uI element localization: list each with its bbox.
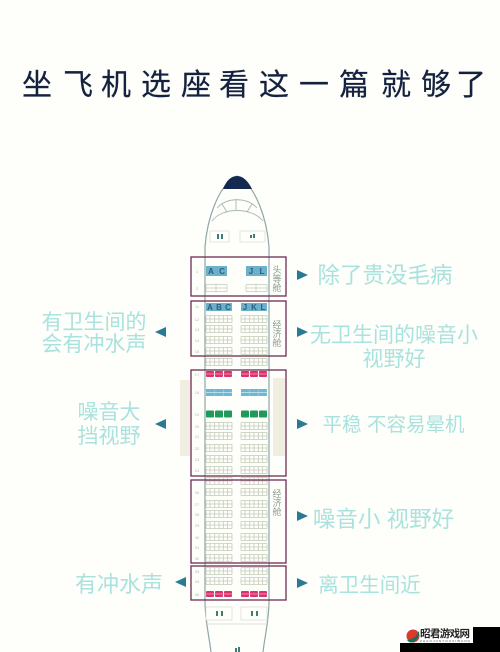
panel: first class: 1 [196,269,199,274]
panel: exit row section [191,370,286,476]
panel: rear rows: 34 [195,579,200,584]
label: stable: 平稳 不容易晕机 [323,414,465,436]
panel: first class: 2 [196,286,199,291]
panel: economy rear: 29 [195,523,200,528]
seats: A C: C [219,267,225,276]
icon: nose cap [223,176,252,189]
label: expensive: 除了贵没毛病 [317,263,453,288]
panel: economy front: 15 [195,349,200,354]
seats: A B C: B [216,303,222,312]
panel: exit row section: 17 [195,372,200,377]
panel: economy front: 经 [272,319,282,330]
panel: first class [191,257,286,296]
seats: J K L [241,303,267,312]
panel: economy rear: 32 [195,556,200,561]
panel: rear rows: 35 [195,592,200,597]
icon: front toilets [210,231,265,242]
seats: J K L: K [251,303,257,312]
title: 坐飞机选座看这一篇就够了 [22,60,486,104]
panel: exit row section: 19 [195,412,200,417]
label: near lavatory: 离卫生间近 [318,574,421,597]
panel: wing shading [180,378,285,456]
seat rows: standard [206,316,267,584]
panel: economy front: 12 [195,317,200,322]
seats: J L [246,266,267,276]
watermark logo [400,627,500,652]
icon: logo ball [406,630,420,642]
panel: exit row section: 24 [195,468,200,473]
aircraft fuselage [205,176,269,652]
panel: first class: 舱 [272,282,282,293]
panel: exit row section: 18 [195,390,200,395]
seats: J L: J [249,267,253,276]
panel: economy rear: 经 [272,488,282,499]
label: quiet: 噪音小 视野好 [313,507,454,532]
watermark logo: 昭君游戏网 [420,627,470,640]
label: no lavatory: 视野好 [362,348,426,371]
seats: J L: L [260,267,265,276]
panel: economy front: 13 [195,327,200,332]
watermark logo: ZHAOJUNYOUXIWANG [420,639,471,643]
seats: A B C: C [225,303,231,312]
panel: economy rear: 30 [195,535,200,540]
panel: rear rows: 33 [195,569,200,574]
panel: economy front: 舱 [272,337,282,348]
label: has lavatory [42,311,146,356]
label: has lavatory: 会有冲水声 [42,333,146,356]
panel: economy front: 济 [272,328,282,339]
panel: rear rows [191,566,286,600]
seats: row 2 [206,284,267,292]
label: flush noise: 有冲水声 [75,572,163,597]
panel: economy rear: 27 [195,502,200,507]
panel: economy rear [191,480,286,563]
panel: exit row section: 20 [195,424,200,429]
seats: green row [206,410,267,418]
panel: economy rear: 31 [195,545,200,550]
seats: A C [206,266,227,276]
panel: exit row section: 23 [195,457,200,462]
arrows [155,270,308,588]
panel: economy rear: 28 [195,512,200,517]
panel: exit row section: 21 [195,434,200,439]
label: has lavatory: 有卫生间的 [42,311,146,334]
panel: economy rear: 26 [195,490,200,495]
label: noisy: 挡视野 [78,425,140,448]
seats: J K L: L [261,303,266,312]
seats: pink rear row [206,591,267,597]
panel: first class: 等 [272,273,282,284]
label: no lavatory [310,324,478,371]
panel: exit row section: 22 [195,446,200,451]
label: no lavatory: 无卫生间的噪音小 [310,324,478,347]
panel: economy rear: 济 [272,497,282,508]
seats: A C: A [208,267,214,276]
panel: first class: 头 [272,265,282,275]
seats: A B C: A [207,303,213,312]
label: noisy [78,401,140,448]
seats: pink row [206,371,267,377]
panel: economy front [191,301,286,356]
panel: economy front: 11 [195,304,200,309]
label: noisy: 噪音大 [78,401,140,424]
seats: A B C [206,303,232,312]
seats: J K L: J [243,303,247,312]
panel: economy front: 14 [195,338,200,343]
seats: blue row [206,389,267,396]
panel: economy rear: 舱 [272,506,282,517]
icon: rear toilets [206,607,267,652]
